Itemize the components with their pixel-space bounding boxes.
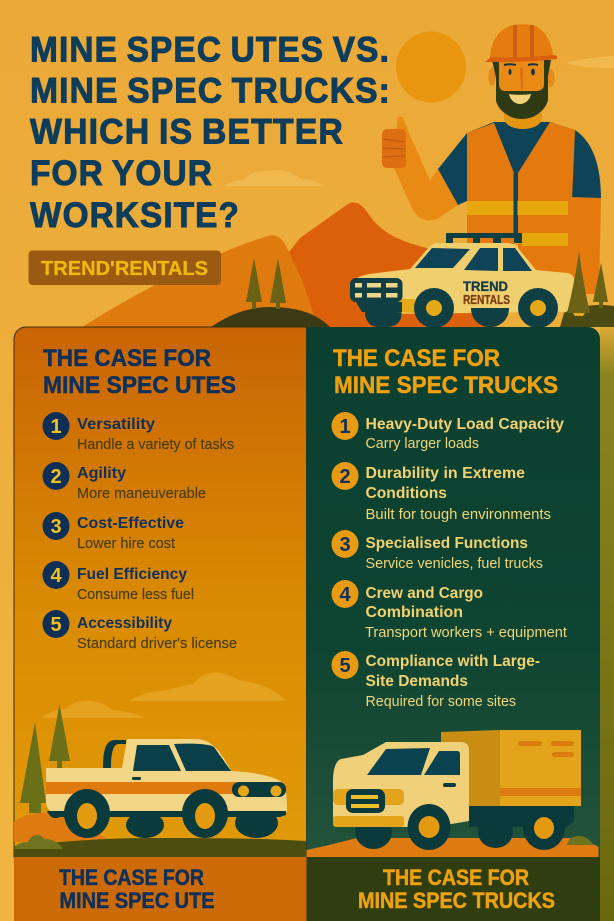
item 4: fuel efficiency: Fuel Efficiency xyxy=(77,566,187,583)
roof rack xyxy=(446,233,522,243)
truck cab xyxy=(333,742,469,827)
item 1: versatility: 1 xyxy=(50,416,62,438)
footer: utes xyxy=(14,857,306,921)
item 1: load capacity: Carry larger loads xyxy=(366,436,479,452)
truck grille xyxy=(346,789,385,813)
car door logo xyxy=(463,278,510,307)
item 2: durability: 2 xyxy=(339,466,351,488)
title: FOR YOUR xyxy=(30,153,213,193)
ute body xyxy=(46,739,287,812)
item 3: cost-effective: Cost-Effective xyxy=(77,515,184,532)
clouds xyxy=(42,673,286,718)
item 3: cost-effective: 3 xyxy=(50,516,62,538)
item 3: specialised functions: Specialised Functions xyxy=(366,535,528,552)
car grille xyxy=(350,278,402,312)
item 5: compliance: 5 xyxy=(339,655,351,677)
item 4: fuel efficiency: 4 xyxy=(50,565,62,587)
item 5: accessibility: Accessibility xyxy=(77,615,172,632)
item 4: crew and cargo: Crew and Cargo xyxy=(366,585,483,602)
brand badge xyxy=(28,250,221,285)
item 5: accessibility xyxy=(42,610,237,652)
item 2: agility: Agility xyxy=(77,465,126,482)
ute under wheels xyxy=(126,808,278,838)
title: MINE SPEC UTES VS. xyxy=(30,30,390,70)
footer: trucks: MINE SPEC TRUCKS xyxy=(358,888,555,913)
item 4: fuel efficiency xyxy=(42,561,194,603)
title: WORKSITE? xyxy=(30,195,240,235)
heading: utes xyxy=(43,345,236,399)
ground xyxy=(306,836,598,857)
brand badge: TREND'RENTALS xyxy=(41,258,208,280)
item 3: specialised functions xyxy=(332,530,543,572)
item 3: cost-effective: Lower hire cost xyxy=(77,536,175,552)
item 5: compliance: Site Demands xyxy=(366,673,468,690)
heading: trucks: THE CASE FOR xyxy=(333,345,500,372)
title: MINE SPEC TRUCKS: xyxy=(30,70,391,110)
truck door handle xyxy=(443,783,456,787)
item 1: load capacity xyxy=(332,412,564,452)
ute roll bar xyxy=(103,740,126,768)
item 2: durability: Built for tough environments xyxy=(366,507,551,523)
heading: trucks: MINE SPEC TRUCKS xyxy=(334,372,558,399)
truck xyxy=(333,730,581,850)
item 3: specialised functions: Service venicles, fuel trucks xyxy=(366,556,543,572)
truck under wheels xyxy=(355,815,513,849)
item 2: durability: Durability in Extreme xyxy=(366,465,525,482)
ute door handle xyxy=(132,777,141,780)
worker vest xyxy=(467,122,575,294)
item 3: cost-effective xyxy=(42,512,184,552)
heading: utes: MINE SPEC UTES xyxy=(43,372,236,399)
hill and trees xyxy=(211,258,330,327)
truck cargo box xyxy=(441,730,581,806)
item 4: crew and cargo: Combination xyxy=(366,604,463,621)
ute windows xyxy=(133,744,231,771)
worker head xyxy=(488,60,554,129)
item 2: agility xyxy=(42,462,206,502)
worker right arm xyxy=(567,197,601,294)
item 2: agility: More maneuverable xyxy=(77,486,206,502)
worker left arm xyxy=(395,163,458,220)
car door logo: RENTALS xyxy=(463,293,510,307)
item 2: durability: Conditions xyxy=(366,485,447,502)
item 1: load capacity: 1 xyxy=(339,416,351,438)
ute stripe xyxy=(46,782,236,794)
item 4: crew and cargo: 4 xyxy=(339,584,351,606)
clouds in sky xyxy=(223,56,614,186)
worker hand xyxy=(382,117,422,170)
item 4: crew and cargo: Transport workers + equipment xyxy=(365,625,567,641)
car door logo: TREND xyxy=(463,278,508,294)
item 5: accessibility: Standard driver's license xyxy=(77,636,237,652)
item 4: fuel efficiency: Consume less fuel xyxy=(77,587,194,603)
worker xyxy=(382,24,601,294)
ground xyxy=(14,812,306,857)
footer: trucks: THE CASE FOR xyxy=(383,865,529,890)
car body xyxy=(351,243,574,314)
truck chassis xyxy=(469,806,574,827)
item 2: agility: 2 xyxy=(50,466,62,488)
item 5: compliance: Required for some sites xyxy=(366,694,516,710)
ute wheels xyxy=(64,789,228,838)
car bumper xyxy=(395,299,415,313)
footer: utes: MINE SPEC UTE xyxy=(60,888,214,913)
item 1: load capacity: Heavy-Duty Load Capacity xyxy=(366,416,564,433)
heading: trucks xyxy=(333,345,558,399)
panel: mine spec utes xyxy=(14,327,306,857)
right hill and trees xyxy=(560,251,614,327)
item 3: specialised functions: 3 xyxy=(339,534,351,556)
heading: utes: THE CASE FOR xyxy=(43,345,211,372)
truck windows xyxy=(367,748,460,775)
right edge strip xyxy=(600,327,614,921)
item 2: durability xyxy=(332,462,551,523)
item 5: accessibility: 5 xyxy=(50,614,62,636)
under wheels xyxy=(365,302,509,327)
item 1: versatility: Handle a variety of tasks xyxy=(77,437,234,453)
item 4: crew and cargo xyxy=(332,580,567,641)
car windows xyxy=(415,248,532,271)
truck front stripes xyxy=(333,789,404,827)
car wheels xyxy=(414,288,558,328)
panel: mine spec trucks xyxy=(306,327,600,857)
sun xyxy=(396,32,466,102)
ute xyxy=(46,739,287,838)
car xyxy=(350,233,574,328)
ute sill xyxy=(47,811,286,818)
worker helmet xyxy=(485,24,557,62)
truck wheels xyxy=(408,804,565,850)
footer: utes: THE CASE FOR xyxy=(59,865,204,890)
worker shirt xyxy=(438,122,601,240)
item 1: versatility: Versatility xyxy=(77,416,155,433)
footer: trucks xyxy=(306,857,600,921)
title: WHICH IS BETTER xyxy=(30,112,344,152)
item 5: compliance xyxy=(332,651,540,710)
item 5: compliance: Compliance with Large- xyxy=(366,653,540,670)
item 1: versatility xyxy=(42,412,234,453)
title xyxy=(30,30,391,235)
ute headlights xyxy=(232,782,286,797)
trees xyxy=(20,704,70,813)
mountains xyxy=(82,202,497,327)
